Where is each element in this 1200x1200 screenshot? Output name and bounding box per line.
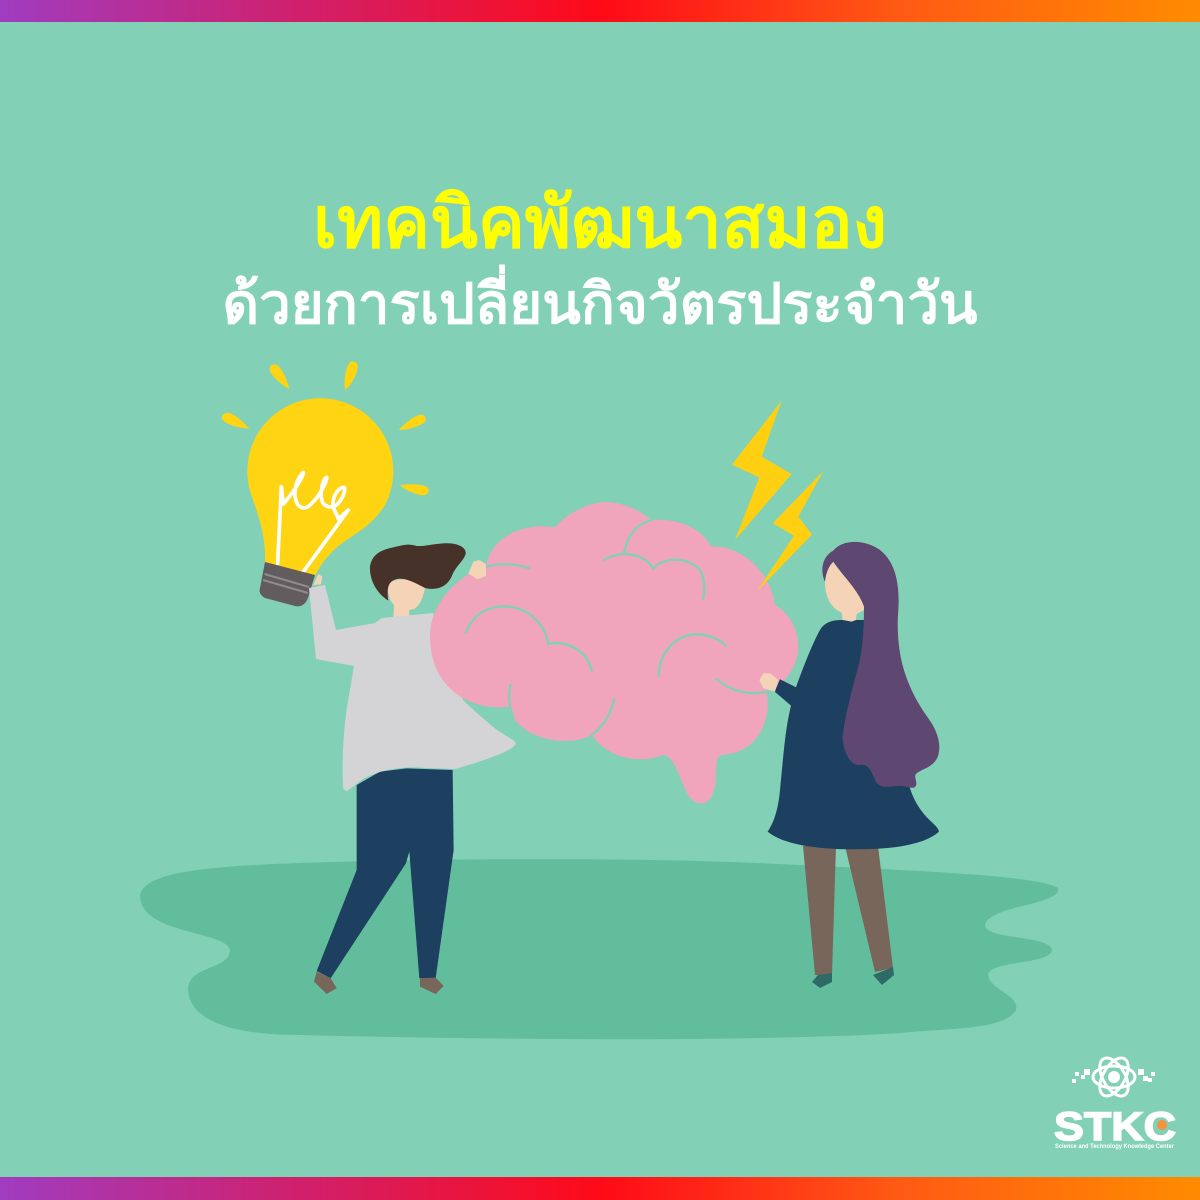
woman's legs <box>803 846 893 975</box>
woman's hair <box>822 542 939 788</box>
woman's shoes <box>812 967 894 988</box>
top gradient bar <box>0 0 1200 22</box>
woman's hand <box>759 673 778 692</box>
filament <box>278 473 348 572</box>
logo pixel squares <box>1072 1069 1155 1083</box>
man's sweater <box>309 585 516 791</box>
icon: lightning bolts <box>732 401 823 592</box>
man's hand on brain <box>468 560 486 579</box>
cap threads <box>263 574 309 593</box>
subtitle: ด้วยการเปลี่ยนกิจวัตรประจำวัน <box>222 264 978 335</box>
logo tagline: Science and Technology Knowledge Center <box>1055 1144 1175 1150</box>
logo: STKC <box>1054 1053 1176 1150</box>
woman's dress <box>768 620 939 849</box>
light rays <box>222 361 429 495</box>
logo atom icon <box>1093 1053 1135 1101</box>
brain folds <box>466 520 770 735</box>
figure: woman <box>759 542 939 988</box>
bottom gradient bar <box>0 1177 1200 1200</box>
ground shape <box>140 859 1058 1039</box>
logo orange dot <box>1157 1120 1167 1130</box>
title: เทคนิคพัฒนาสมอง <box>313 184 887 263</box>
figure: man <box>309 543 516 994</box>
man's pants <box>314 768 454 994</box>
icon: light bulb <box>222 361 429 606</box>
woman's face <box>825 562 864 622</box>
bulb glass <box>247 398 393 576</box>
brain shape <box>430 502 798 804</box>
man's head <box>313 543 466 618</box>
bulb cap <box>260 562 315 606</box>
logo wordmark: STKC <box>1054 1105 1176 1149</box>
brain <box>430 502 798 804</box>
